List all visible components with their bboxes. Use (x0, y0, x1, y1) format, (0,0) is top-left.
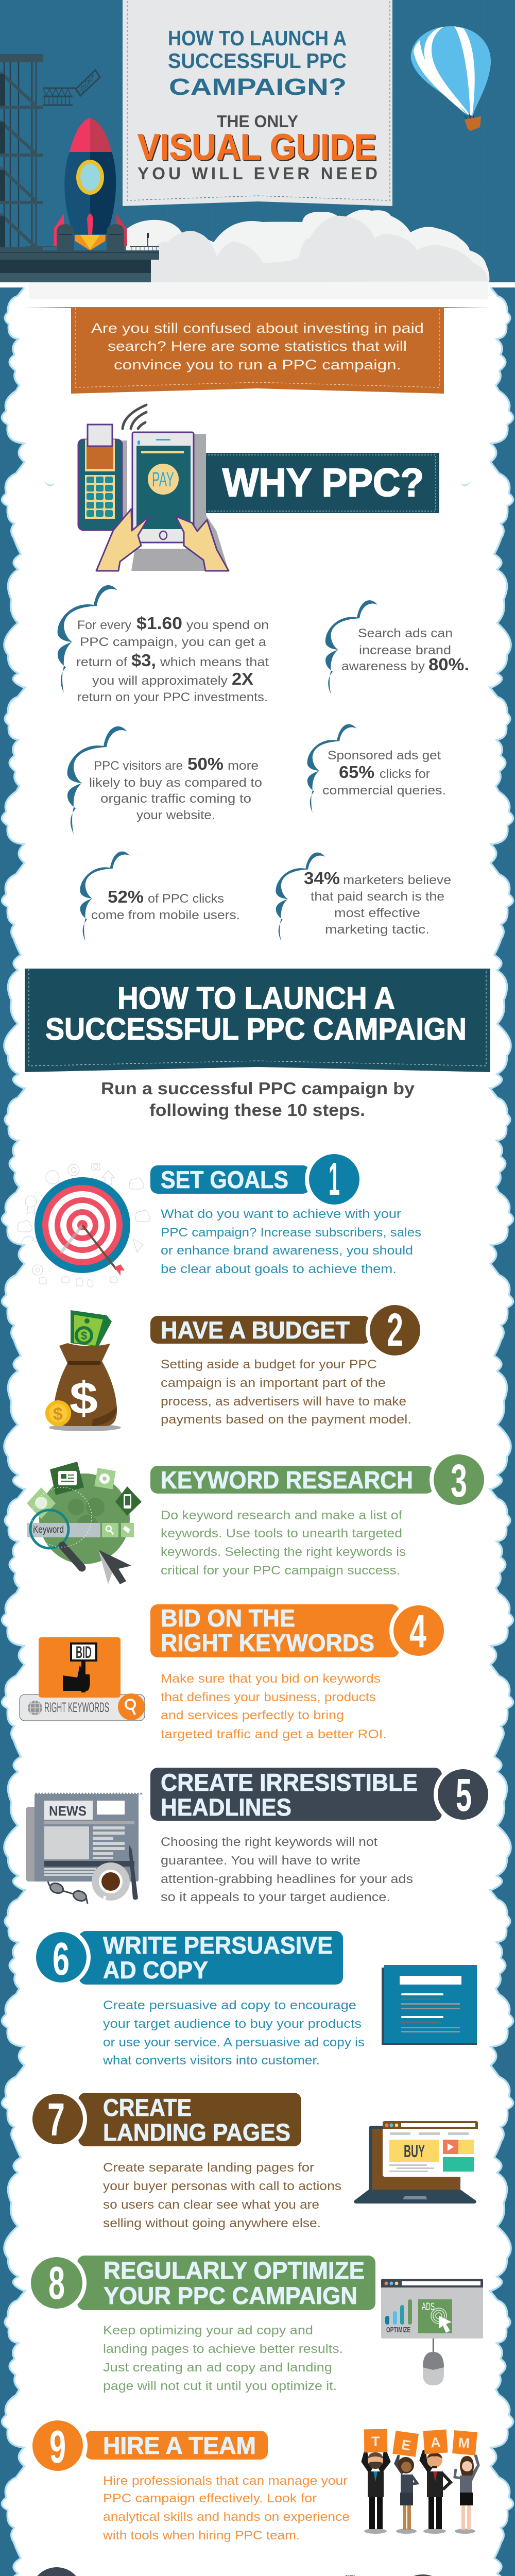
body text: analytical skills and hands on experience (103, 2510, 350, 2524)
icon: bid sign (20, 1637, 145, 1721)
body text: Setting aside a budget for your PPC (161, 1358, 377, 1371)
stat: likely to buy: your website. (136, 808, 215, 822)
intro text: search? Here are some statistics that will (108, 338, 407, 354)
body text: landing pages to achieve better results. (103, 2342, 343, 2356)
body text (161, 1509, 406, 1578)
body text (103, 2324, 343, 2393)
section intro (101, 1079, 415, 1120)
stat: sponsored ads: clicks for (380, 767, 430, 781)
body text: keywords. Selecting the right keywords is (161, 1545, 406, 1559)
heading pill (28, 2090, 301, 2148)
stat: sponsored ads: commercial queries. (322, 784, 446, 798)
body text (103, 2161, 341, 2230)
body text: be clear about goals to achieve them. (161, 1262, 397, 1276)
icon: rocket (54, 118, 127, 250)
heading pill: SET GOALS (161, 1166, 288, 1193)
stat: likely to buy: likely to buy as compared to (89, 776, 262, 790)
title banner (123, 0, 392, 206)
step 6: write persuasive ad copy (32, 1928, 477, 2067)
step 9: hire a team (28, 2416, 479, 2543)
icon: team holding letters: E (401, 2437, 412, 2453)
stat: return on spend: $1.60 (136, 614, 182, 633)
hands (96, 509, 149, 571)
stat: marketers: most effective (334, 906, 420, 920)
stat: return on spend: return on your PPC investments. (77, 690, 268, 704)
icon: crane arm (43, 70, 100, 105)
section banner: SUCCESSFUL PPC CAMPAIGN (45, 1012, 467, 1046)
body text: Create persuasive ad copy to encourage (103, 1998, 356, 2012)
icon: bid sign: RIGHT KEYWORDS (44, 1700, 109, 1715)
step 8: regularly optimize (27, 2253, 483, 2393)
stat: marketers: that paid search is the (311, 890, 444, 904)
body text: guarantee. You will have to write (161, 1854, 360, 1868)
step 4: bid on the right keywords (20, 1601, 448, 1741)
heading pill: 2 (387, 1304, 403, 1356)
stat: marketers: marketers believe (343, 873, 451, 887)
title: HOW TO LAUNCH A (168, 26, 347, 50)
body text: Choosing the right keywords will not (161, 1835, 377, 1849)
stat: return on spend: $3, (131, 651, 156, 670)
stat: likely to buy: PPC visitors are (94, 759, 183, 773)
body text: Do keyword research and make a list of (161, 1509, 402, 1522)
subtitle: YOU WILL EVER NEED (138, 164, 377, 183)
body text: payments based on the payment model. (161, 1413, 411, 1427)
phone (132, 432, 194, 543)
icon: launch platform (0, 233, 159, 282)
body text: critical for your PPC campaign success. (161, 1564, 400, 1578)
intro ribbon (71, 308, 444, 394)
body text: your target audience to buy your products (103, 2017, 362, 2031)
body text: so it appeals to your target audience. (161, 1890, 390, 1904)
step 2: have a budget (45, 1301, 424, 1431)
why ppc heading (194, 453, 439, 513)
icon: ad copy document (382, 1965, 477, 2045)
body text (161, 1207, 421, 1276)
title: CAMPAIGN? (169, 74, 347, 100)
icon: launch clouds (126, 210, 489, 282)
heading pill: HIRE A TEAM (103, 2432, 256, 2459)
body text: or enhance brand awareness, you should (161, 1244, 413, 1258)
section intro: Run a successful PPC campaign by (101, 1079, 415, 1098)
body text: Just creating an ad copy and landing (103, 2361, 332, 2375)
step 5: create irresistible headlines (26, 1765, 492, 1904)
body text: that defines your business, products (161, 1690, 376, 1704)
flame (75, 235, 106, 250)
letter cards (364, 2429, 477, 2457)
body text (161, 1358, 411, 1427)
stat: likely to buy: 50% (187, 754, 224, 773)
shadows (122, 440, 127, 523)
stat: return on spend: PPC campaign, you can get a (80, 635, 267, 649)
icon: money bag: $ (81, 1329, 87, 1342)
body text (102, 1998, 365, 2067)
stat: return on spend: For every (77, 618, 131, 632)
icon: laptop landing page (354, 2121, 478, 2204)
title (168, 26, 347, 100)
stat: likely to buy: more (228, 759, 259, 773)
heading pill: BID ON THE (161, 1604, 295, 1632)
heading pill (150, 1765, 492, 1824)
body text: Make sure that you bid on keywords (161, 1672, 381, 1686)
heading pill: 7 (47, 2094, 65, 2146)
heading pill (28, 2416, 268, 2476)
icon: laptop landing page: BUY (404, 2142, 425, 2161)
person 3 (420, 2451, 451, 2529)
step 7: create landing pages (28, 2090, 478, 2230)
body text: Hire professionals that can manage your (103, 2474, 348, 2488)
icon: team holding letters (362, 2429, 479, 2534)
body text: campaign is an important part of the (161, 1376, 386, 1390)
body text: targeted traffic and get a better ROI. (161, 1727, 387, 1741)
heading pill: HAVE A BUDGET (161, 1316, 350, 1344)
phone: PAY (152, 468, 174, 491)
stat: marketers: marketing tactic. (325, 923, 430, 937)
heading pill: CREATE (103, 2094, 192, 2121)
icon: optimize window and mouse: ADS (422, 2301, 435, 2313)
heading pill (27, 2563, 301, 2576)
section banner (25, 969, 490, 1072)
body text: or use your service. A persuasive ad copy is (103, 2036, 365, 2049)
heading pill: 6 (53, 1934, 70, 1985)
heading pill: WRITE PERSUASIVE (103, 1931, 333, 1959)
stat: brand awareness (325, 600, 469, 694)
icon: money bag: $ (70, 1372, 98, 1423)
stat: marketers (276, 853, 451, 941)
body text: process, as advertisers will have to make (161, 1395, 406, 1409)
body text: keywords. Use tools to unearth targeted (161, 1527, 402, 1540)
stat: likely to buy: organic traffic coming to (100, 792, 251, 806)
intro text: Are you still confused about investing in paid (91, 320, 424, 336)
heading pill (32, 1928, 343, 1987)
icon: newspaper (26, 1792, 143, 1904)
icon: keyword search (27, 1462, 142, 1584)
body text: Create separate landing pages for (103, 2161, 314, 2175)
signal arcs (123, 405, 146, 429)
icon: launch tower (0, 54, 100, 250)
heading pill (27, 2253, 375, 2313)
heading pill: RIGHT KEYWORDS (161, 1629, 374, 1656)
stat: return on spend: return of (76, 655, 127, 669)
section intro: following these 10 steps. (149, 1100, 365, 1120)
icon: team holding letters: T (371, 2434, 380, 2449)
subtitle (138, 112, 377, 183)
icon: optimize window and mouse: OPTIMIZE (386, 2326, 410, 2334)
heading pill: AD COPY (103, 1956, 208, 1984)
stat: marketers: 34% (304, 869, 340, 888)
icon: hot air balloon (411, 26, 491, 131)
body text: PPC campaign effectively. Look for (103, 2492, 317, 2505)
heading pill: 3 (451, 1455, 467, 1507)
body text: so users can clear see what you are (103, 2198, 319, 2212)
stat: likely to buy (67, 726, 262, 834)
person 1 (362, 2452, 390, 2529)
stat: brand awareness: increase brand (359, 643, 451, 657)
stat: return on spend: which means that (160, 655, 269, 669)
intro text: convince you to run a PPC campaign. (114, 357, 401, 372)
subtitle: VISUAL GUIDE (138, 127, 376, 168)
why ppc heading: WHY PPC? (222, 461, 424, 505)
heading pill: YOUR PPC CAMPAIGN (104, 2282, 357, 2309)
icon: keyword search: Keyword (33, 1524, 64, 1535)
heading pill: LANDING PAGES (103, 2119, 290, 2146)
stat: mobile clicks: of PPC clicks (148, 892, 224, 906)
body text: and services perfectly to bring (161, 1708, 344, 1722)
icon: money bag (45, 1310, 121, 1431)
title: SUCCESSFUL PPC (168, 49, 347, 73)
step 3: keyword research (27, 1450, 488, 1584)
heading pill (150, 1601, 448, 1660)
intro text (91, 320, 424, 372)
stat: sponsored ads: Sponsored ads get (328, 749, 441, 762)
body text: selling without going anywhere else. (103, 2216, 321, 2230)
heading pill (150, 1301, 424, 1360)
icon: team holding letters: A (430, 2434, 441, 2451)
body text (161, 1835, 413, 1904)
icon: optimize window and mouse (381, 2279, 483, 2385)
stat: return on spend (58, 585, 269, 704)
stat: return on spend: 2X (232, 669, 253, 688)
body text (161, 1672, 387, 1741)
person 2 (394, 2455, 417, 2530)
heading pill: 5 (456, 1770, 472, 1821)
body text: attention-grabbing headlines for your ads (161, 1872, 413, 1886)
decorative crescents (43, 480, 472, 486)
body text: what converts visitors into customer. (102, 2054, 320, 2067)
stat: sponsored ads: 65% (339, 762, 374, 782)
stat: brand awareness: awareness by (341, 659, 425, 673)
heading pill: 4 (409, 1606, 426, 1657)
section banner: HOW TO LAUNCH A (117, 981, 395, 1015)
card terminal (78, 425, 122, 530)
stat: return on spend: you will approximately (92, 674, 228, 688)
subtitle: THE ONLY (217, 112, 298, 131)
heading pill: KEYWORD RESEARCH (161, 1466, 413, 1494)
step 1: set goals (18, 1150, 421, 1287)
body text: your buyer personas with call to actions (103, 2179, 341, 2193)
header background (0, 0, 515, 282)
icon: target (18, 1163, 150, 1287)
heading pill: 9 (49, 2421, 66, 2473)
stat: return on spend: you spend on (186, 618, 269, 632)
icon: team holding letters: M (458, 2435, 471, 2451)
person 4 (455, 2455, 479, 2530)
icon: bid sign: BID (76, 1643, 92, 1662)
icon: mobile payment (78, 405, 229, 571)
stat: mobile clicks (80, 852, 240, 941)
heading pill (150, 1450, 488, 1509)
stat: sponsored ads (307, 724, 446, 812)
step 10: track results (27, 2563, 461, 2576)
stat: mobile clicks: come from mobile users. (91, 908, 240, 922)
body text: with tools when hiring PPC team. (102, 2529, 300, 2543)
body text: Keep optimizing your ad copy and (103, 2324, 313, 2337)
stat: brand awareness: 80%. (428, 655, 469, 674)
heading pill: HEADLINES (161, 1793, 291, 1821)
stat: brand awareness: Search ads can (358, 626, 453, 640)
body text: What do you want to achieve with your (161, 1207, 401, 1221)
heading pill: 8 (48, 2258, 65, 2309)
pods (57, 224, 74, 250)
body text: PPC campaign? Increase subscribers, sales (161, 1226, 421, 1240)
icon: money bag: $ (53, 1404, 63, 1424)
icon: newspaper: NEWS (49, 1803, 87, 1819)
heading pill: REGULARLY OPTIMIZE (104, 2257, 365, 2284)
heading pill (150, 1150, 364, 1209)
heading pill: CREATE IRRESISTIBLE (161, 1769, 418, 1796)
body text (102, 2474, 350, 2543)
body text: page will not cut it until you optimize it. (103, 2379, 337, 2393)
stat: mobile clicks: 52% (108, 887, 144, 906)
heading pill: 1 (329, 1154, 340, 1205)
